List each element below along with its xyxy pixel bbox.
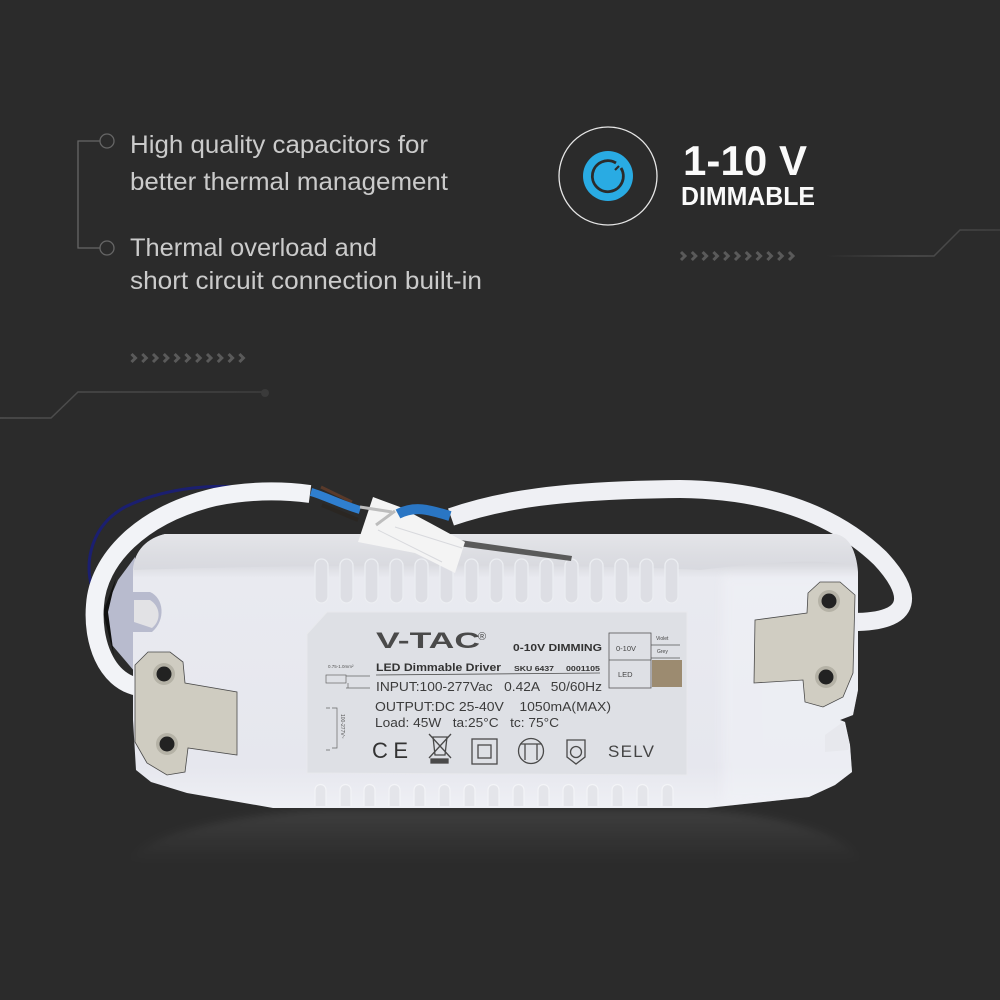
connector [358, 497, 465, 573]
dark probe wire [458, 540, 572, 561]
text: thermal overload: short circuit connection built-in [130, 267, 482, 295]
text: thermal overload [130, 234, 482, 295]
chevrons right [681, 252, 793, 260]
wiring table [609, 633, 682, 688]
certification marks [372, 734, 655, 764]
cable right [451, 489, 903, 622]
top band shading [134, 534, 857, 570]
wiring diagrams: 0.75-1.0mm² [328, 664, 354, 669]
wiring table: Grey [657, 649, 668, 655]
wiring diagrams: 100-277V~ [339, 714, 345, 739]
left notch [133, 592, 162, 632]
chevrons left [132, 354, 243, 362]
reflection under driver [130, 810, 860, 862]
side light panel [726, 690, 858, 806]
logo: V-TAC: V-TAC [376, 628, 480, 653]
label: SKU: SKU 6437 [514, 664, 554, 673]
label: specs [375, 679, 611, 730]
left notch insert [134, 600, 159, 628]
icon: dimmer knob in ring [559, 127, 657, 225]
text: capacitors [130, 131, 448, 196]
bracket connector with bullets [78, 134, 114, 255]
label: specs: OUTPUT:DC 25-40V 1050mA(MAX) [375, 699, 611, 714]
heading: 1-10 V: 1-10 V [683, 137, 807, 184]
wiring table: LED [618, 670, 633, 679]
certification marks: CE [372, 738, 408, 763]
wiring table: 0-10V [616, 644, 636, 653]
wiring diagrams [326, 664, 370, 750]
wiring table: Violet [656, 636, 669, 642]
label sticker [307, 612, 687, 775]
certification marks: SELV [608, 742, 655, 761]
label: product name: LED Dimmable Driver [376, 662, 502, 674]
text: capacitors: High quality capacitors for [130, 131, 428, 159]
bottom ridges [315, 784, 673, 806]
top ridges [315, 559, 678, 603]
label: dimming: 0-10V DIMMING [513, 642, 602, 654]
logo: V-TAC: ® [478, 631, 486, 643]
text: capacitors: better thermal management [130, 168, 448, 196]
right notch [825, 722, 850, 752]
label: specs: INPUT:100-277Vac 0.42A 50/60Hz [376, 679, 602, 694]
cable left [95, 491, 310, 687]
dark wire [89, 486, 250, 588]
circuit line left [0, 389, 269, 418]
label: SKU [514, 664, 600, 673]
inner wires [311, 487, 450, 525]
left metal plate [135, 652, 237, 775]
right metal plate [754, 582, 855, 707]
heading: DIMMABLE: DIMMABLE [681, 181, 815, 211]
housing body [133, 534, 858, 808]
logo: V-TAC [376, 628, 486, 653]
circuit line right [826, 230, 1000, 256]
black crescent [103, 578, 116, 656]
driver housing [133, 534, 870, 808]
shaded panel behind left cable [104, 557, 135, 672]
label: specs: Load: 45W ta:25°C tc: 75°C [375, 715, 559, 730]
label: SKU: 0001105 [566, 664, 600, 673]
screws [153, 590, 840, 755]
text: thermal overload: Thermal overload and [130, 234, 377, 262]
